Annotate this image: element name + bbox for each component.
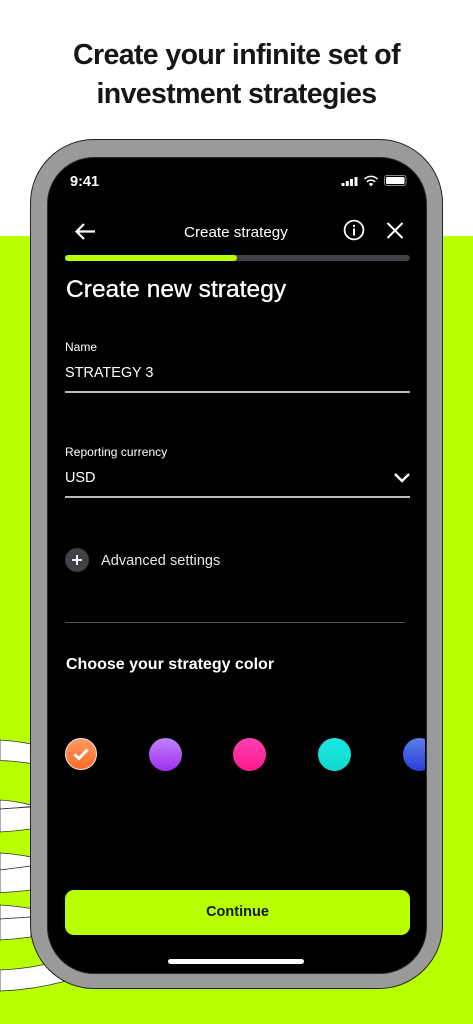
progress fill — [65, 255, 237, 261]
decorative white coil rings — [0, 740, 64, 992]
progress bar — [65, 255, 410, 261]
header title: Create strategy — [184, 224, 288, 240]
title: Create your infinite set of — [73, 39, 400, 71]
title — [73, 39, 401, 110]
currency underline — [65, 496, 410, 498]
status bar icons — [342, 175, 406, 186]
colour swatch: pink — [233, 738, 266, 771]
back arrow icon — [75, 223, 95, 240]
title: investment strategies — [96, 78, 376, 110]
colour swatch: turquoise — [318, 738, 351, 771]
colour swatch: blue, cropped — [403, 738, 425, 771]
colour heading: Choose your strategy color — [66, 656, 274, 672]
advanced settings label: Advanced settings — [101, 552, 220, 568]
continue button — [65, 890, 410, 935]
chevron icon — [394, 473, 410, 483]
phone — [30, 139, 443, 989]
green background panel — [0, 236, 473, 1024]
currency value: USD — [65, 470, 95, 486]
status bar time: 9:41 — [70, 174, 99, 190]
plus icon — [65, 548, 89, 572]
colour swatch: orange selected — [65, 738, 97, 770]
name value: STRATEGY 3 — [65, 365, 153, 381]
phone frame — [30, 139, 443, 989]
screen heading: Create new strategy — [66, 276, 286, 302]
info icon — [344, 220, 364, 240]
name label: Name — [65, 340, 97, 354]
divider — [65, 622, 405, 623]
phone screen — [46, 156, 426, 974]
continue button: Continue — [206, 904, 269, 920]
colour swatch: purple — [149, 738, 182, 771]
name underline — [65, 391, 410, 392]
currency label: Reporting currency — [65, 445, 167, 459]
close icon — [386, 222, 404, 239]
home indicator — [168, 959, 304, 964]
